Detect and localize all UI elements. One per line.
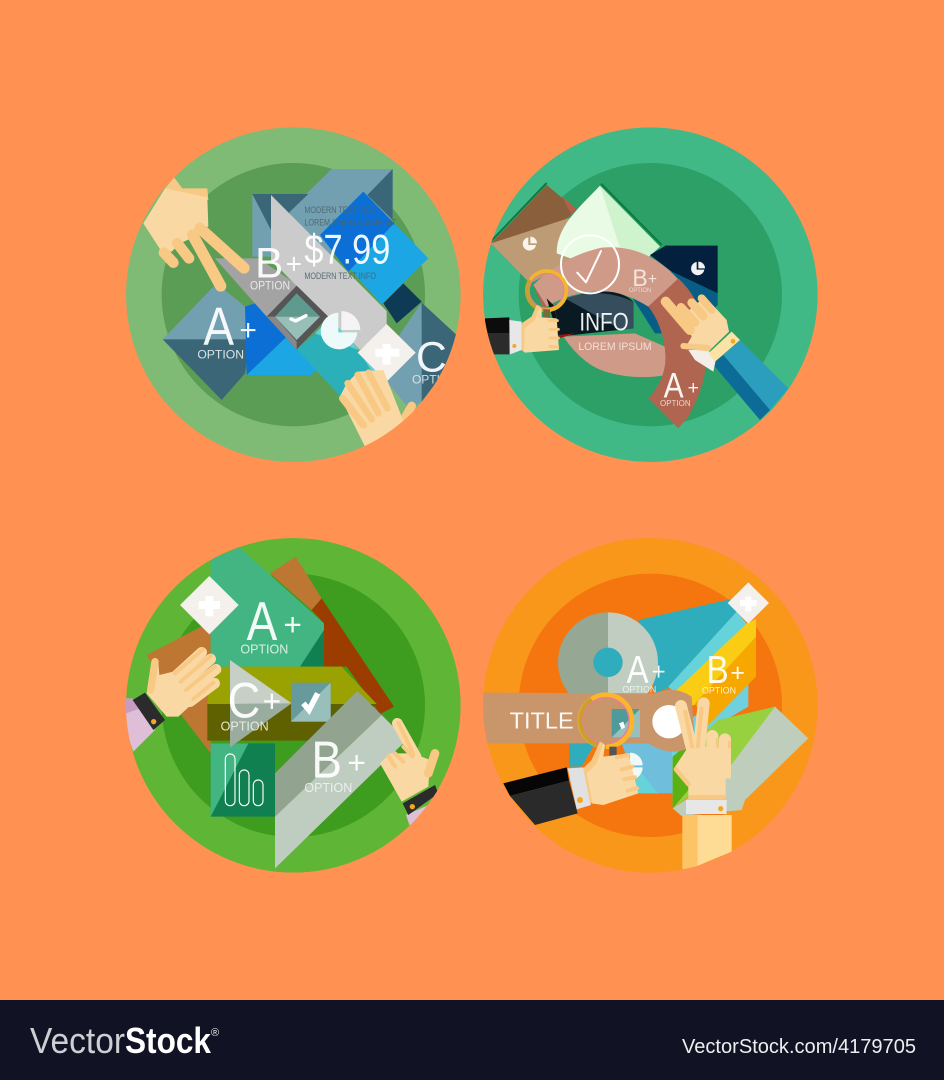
option C label: C	[228, 672, 260, 728]
grey triangle	[230, 660, 292, 747]
price text: LOREM IPSUM DOLOR SIT	[304, 218, 396, 228]
option C label	[221, 672, 281, 733]
right option C panel	[387, 303, 457, 410]
option A label	[660, 373, 698, 406]
option B label: +	[347, 745, 366, 781]
lower blue panel	[569, 683, 748, 808]
centre check box	[267, 286, 328, 349]
option B label: OPTION	[702, 685, 736, 695]
back ribbon	[252, 169, 393, 260]
check square	[291, 683, 331, 722]
navy card	[632, 245, 718, 333]
option A label: A	[247, 590, 278, 652]
option B label: B	[255, 239, 283, 287]
circle badge	[483, 538, 818, 873]
blue diamond	[320, 192, 428, 304]
brown card	[490, 183, 577, 283]
option A label: OPTION	[197, 348, 244, 362]
check circle	[561, 235, 619, 293]
pie icon	[321, 311, 360, 349]
title band	[483, 690, 695, 752]
VectorStock logo: ®	[211, 1027, 219, 1039]
plus diamond	[358, 324, 416, 382]
circle badge	[126, 538, 461, 873]
hand: right pointing	[380, 723, 438, 827]
magnifier	[580, 695, 632, 757]
footer bar	[0, 1000, 944, 1080]
price text: MODERN TEXT INFO	[304, 271, 376, 281]
price text	[304, 205, 396, 281]
hand: two fingers pointing	[143, 177, 244, 286]
green arrow card	[211, 547, 324, 668]
option B label	[250, 248, 301, 290]
option B label: OPTION	[304, 781, 352, 795]
option C label: C	[416, 334, 447, 382]
dark strip	[383, 283, 422, 323]
option B label: B	[632, 265, 648, 292]
small check square	[612, 709, 640, 737]
hand: pointing with blue sleeve	[666, 297, 788, 420]
option A label	[198, 308, 256, 358]
brown strip	[270, 557, 394, 714]
price text: MODERN TEXT INFO	[304, 205, 376, 215]
option B label: OPTION	[250, 278, 290, 292]
circle badge	[483, 127, 818, 462]
hand: thumb up with black sleeve	[485, 305, 559, 354]
option C label: OPTION	[221, 719, 269, 733]
option A label	[622, 648, 666, 695]
option B label	[702, 648, 745, 695]
bar chart icon	[225, 754, 263, 806]
panel: curved ribbon infographic	[483, 127, 818, 462]
option A diamond	[163, 283, 250, 400]
option B label: +	[648, 271, 657, 288]
disc	[558, 612, 658, 712]
option B label: OPTION	[629, 287, 651, 294]
hand: open palm	[340, 370, 415, 447]
image id: VectorStock.com/4179705	[682, 1036, 916, 1058]
info text: INFO	[579, 309, 629, 336]
panel: blue-grey diagonal infographic	[126, 127, 461, 462]
plus diamond	[180, 576, 239, 634]
info text	[579, 312, 651, 350]
panel: orange title infographic	[483, 538, 818, 873]
pale green card	[557, 184, 662, 260]
option A label: OPTION	[660, 398, 691, 408]
hand: left open palm	[126, 649, 216, 752]
option A label: OPTION	[240, 642, 288, 656]
option A label: +	[239, 314, 257, 347]
option B label	[304, 731, 366, 795]
green and grey card	[673, 707, 808, 816]
VectorStock logo: Vector	[30, 1020, 125, 1061]
info text: LOREM IPSUM	[578, 341, 652, 353]
teal bar	[297, 327, 376, 396]
panel: green arrows infographic	[126, 538, 461, 873]
pie fragment	[630, 753, 643, 780]
option B label	[629, 270, 656, 292]
blue pieces	[245, 303, 317, 375]
info box	[547, 291, 633, 338]
title text: TITLE	[510, 707, 574, 733]
option B label: B	[707, 648, 729, 692]
option A label: A	[627, 648, 649, 692]
option B label: +	[730, 659, 745, 687]
option A label: +	[283, 606, 302, 642]
VectorStock logo	[30, 1020, 219, 1061]
price text: $7.99	[304, 225, 390, 272]
olive bar	[207, 667, 377, 741]
option C label: OPTION	[412, 372, 458, 386]
option A label: A	[664, 367, 684, 406]
VectorStock logo: Stock	[125, 1020, 212, 1061]
magnifier	[527, 271, 566, 318]
lower green card	[211, 743, 275, 817]
hand: thumb up with black sleeve	[503, 742, 638, 825]
grey option B ribbon	[275, 691, 407, 868]
option A label: +	[688, 378, 699, 399]
option C label: +	[263, 683, 281, 719]
hand: victory sign with yellow sleeve	[674, 703, 732, 869]
striped banner	[638, 599, 756, 725]
option A label: OPTION	[622, 685, 656, 695]
option A label: +	[652, 659, 666, 686]
option B label: B	[311, 731, 342, 789]
grey arrow	[215, 195, 387, 350]
curved ribbon	[533, 247, 707, 428]
option B label: +	[286, 248, 302, 280]
option A label: A	[203, 298, 234, 357]
option A label	[240, 590, 302, 656]
circle badge	[126, 127, 461, 462]
plus diamond	[728, 582, 769, 624]
white circle	[652, 705, 686, 738]
left brown card	[147, 622, 211, 753]
